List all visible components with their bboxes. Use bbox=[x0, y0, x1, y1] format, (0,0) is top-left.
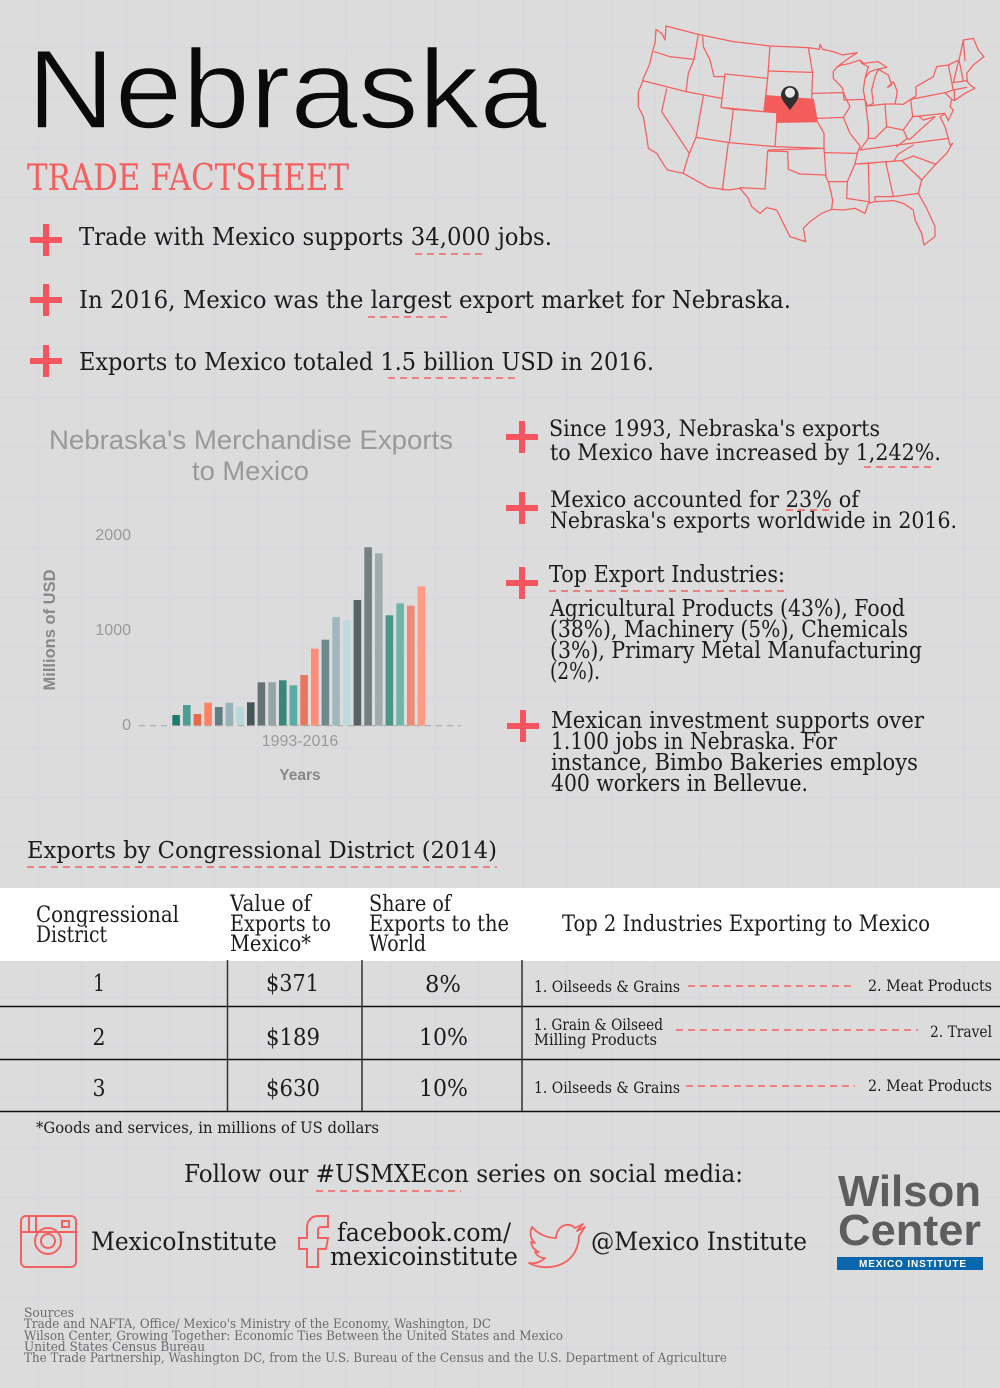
icon: facebook bbox=[299, 1216, 328, 1267]
chart title: Nebraska's Merchandise Exports bbox=[49, 425, 453, 455]
country outline bbox=[638, 26, 984, 245]
bar chart bbox=[41, 527, 461, 784]
table header: Mexico* bbox=[230, 932, 311, 957]
row 1: 2. Meat Products bbox=[868, 977, 992, 995]
fact: Mexican investment: Mexican investment supports over bbox=[551, 708, 924, 734]
row 1: 1 bbox=[93, 971, 105, 997]
fact: top export industries: (38%), Machinery (5%), Chemicals bbox=[550, 617, 908, 643]
table header: Exports to the bbox=[369, 912, 509, 937]
fact: increase since 1993: Since 1993, Nebraska's exports bbox=[549, 417, 880, 442]
sources: Sources bbox=[24, 1306, 74, 1321]
y axis labels: 0 bbox=[122, 717, 131, 734]
table header bbox=[0, 888, 1000, 961]
sources bbox=[24, 1306, 727, 1366]
facebook handle bbox=[330, 1218, 518, 1271]
table footnote: *Goods and services, in millions of US dollars bbox=[36, 1118, 379, 1137]
chart title: to Mexico bbox=[192, 456, 309, 486]
logo: Wilson Center Mexico Institute: Center bbox=[838, 1206, 981, 1255]
state borders bbox=[643, 34, 967, 209]
sources: United States Census Bureau bbox=[24, 1340, 205, 1355]
row 2: Milling Products bbox=[534, 1031, 657, 1049]
fact: Mexican investment bbox=[507, 708, 924, 797]
row 2 bbox=[92, 1016, 992, 1051]
table header: Value of bbox=[229, 892, 313, 917]
fact: Mexican investment: 1.100 jobs in Nebraska. For bbox=[551, 729, 837, 755]
icon: plus bbox=[507, 710, 539, 742]
icon: instagram bbox=[21, 1216, 76, 1267]
row 3 bbox=[92, 1076, 992, 1102]
twitter handle: @Mexico Institute bbox=[591, 1227, 807, 1256]
icon: plus bbox=[30, 284, 62, 316]
table header: Exports to bbox=[230, 912, 331, 937]
y axis labels: 1000 bbox=[95, 622, 131, 639]
x axis title: Years bbox=[279, 767, 321, 784]
bullet: largest export market: In 2016, Mexico was the largest export market for Nebraska. bbox=[79, 286, 791, 314]
row 2: 10% bbox=[419, 1025, 468, 1051]
fact: top export industries: (3%), Primary Metal Manufacturing bbox=[550, 638, 922, 664]
fact: Mexican investment: instance, Bimbo Bakeries employs bbox=[551, 750, 918, 776]
icon: twitter bbox=[529, 1224, 585, 1267]
table header: Congressional bbox=[36, 903, 179, 928]
row 3: 3 bbox=[92, 1076, 106, 1102]
icon: plus bbox=[506, 421, 538, 453]
fact: share of exports worldwide bbox=[506, 488, 957, 534]
row 2: $189 bbox=[266, 1025, 320, 1051]
fact: top export industries: Top Export Industries: bbox=[549, 562, 785, 588]
subtitle: TRADE FACTSHEET bbox=[27, 158, 349, 199]
social heading: Follow our #USMXEcon series on social media: bbox=[184, 1160, 743, 1188]
bars bbox=[172, 547, 425, 726]
fact: Mexican investment: 400 workers in Bellevue. bbox=[551, 771, 808, 797]
fact: increase since 1993 bbox=[506, 417, 941, 467]
icon: plus bbox=[30, 345, 62, 377]
icon: plus bbox=[30, 224, 62, 256]
row 1 bbox=[93, 971, 992, 998]
logo: Wilson Center Mexico Institute bbox=[837, 1167, 983, 1270]
icon: plus bbox=[506, 567, 538, 599]
table header: Top 2 Industries Exporting to Mexico bbox=[562, 912, 930, 937]
facebook handle: facebook.com/ bbox=[337, 1218, 512, 1247]
row 1: $371 bbox=[266, 971, 319, 997]
row 1: 8% bbox=[425, 972, 461, 998]
fact: top export industries bbox=[506, 562, 922, 685]
row 3: $630 bbox=[266, 1076, 320, 1102]
x axis label: 1993-2016 bbox=[262, 733, 338, 750]
row 1: 1. Oilseeds & Grains bbox=[534, 978, 680, 996]
fact: top export industries: Agricultural Products (43%), Food bbox=[549, 596, 905, 622]
chart title bbox=[49, 425, 453, 486]
table header: District bbox=[36, 923, 107, 948]
table heading: Exports by Congressional District (2014) bbox=[27, 838, 497, 864]
logo: Wilson Center Mexico Institute: Wilson bbox=[838, 1167, 981, 1216]
table header: World bbox=[369, 932, 426, 957]
row 2: 2. Travel bbox=[930, 1023, 992, 1041]
sources: Trade and NAFTA, Office/ Mexico's Ministry of the Economy, Washington, DC bbox=[24, 1317, 491, 1332]
title: Nebraska bbox=[27, 27, 548, 152]
facebook handle: mexicoinstitute bbox=[330, 1242, 518, 1271]
instagram handle: MexicoInstitute bbox=[91, 1227, 277, 1256]
fact: increase since 1993: to Mexico have increased by 1,242%. bbox=[550, 441, 941, 466]
fact: top export industries: (2%). bbox=[550, 659, 600, 685]
row 3: 2. Meat Products bbox=[868, 1077, 992, 1095]
y axis labels: 2000 bbox=[95, 527, 131, 544]
row 2: 2 bbox=[92, 1025, 106, 1051]
fact: share of exports worldwide: Nebraska's exports worldwide in 2016. bbox=[550, 509, 957, 534]
state: Nebraska bbox=[764, 96, 817, 122]
icon: map pin bbox=[781, 86, 799, 110]
bullet: 1.5 billion USD: Exports to Mexico totaled 1.5 billion USD in 2016. bbox=[79, 348, 654, 376]
sources: Wilson Center, Growing Together: Economic Ties Between the United States and Mexico bbox=[24, 1329, 563, 1344]
logo: Wilson Center Mexico Institute: MEXICO INSTITUTE bbox=[859, 1259, 966, 1270]
map: United States with Nebraska highlighted bbox=[638, 26, 984, 245]
row 2: 1. Grain & Oilseed bbox=[534, 1016, 663, 1034]
row 3: 10% bbox=[419, 1076, 468, 1102]
sources: The Trade Partnership, Washington DC, from the U.S. Bureau of the Census and the U.S. Department of Agriculture bbox=[24, 1351, 727, 1366]
table bbox=[0, 888, 1000, 1112]
y axis title: Millions of USD bbox=[41, 569, 59, 690]
bullet: 34,000 jobs: Trade with Mexico supports 34,000 jobs. bbox=[79, 223, 552, 251]
row 3: 1. Oilseeds & Grains bbox=[534, 1079, 680, 1097]
table header: Share of bbox=[369, 892, 453, 917]
fact: share of exports worldwide: Mexico accounted for 23% of bbox=[550, 488, 861, 513]
y axis labels bbox=[95, 527, 131, 734]
icon: plus bbox=[506, 492, 538, 524]
